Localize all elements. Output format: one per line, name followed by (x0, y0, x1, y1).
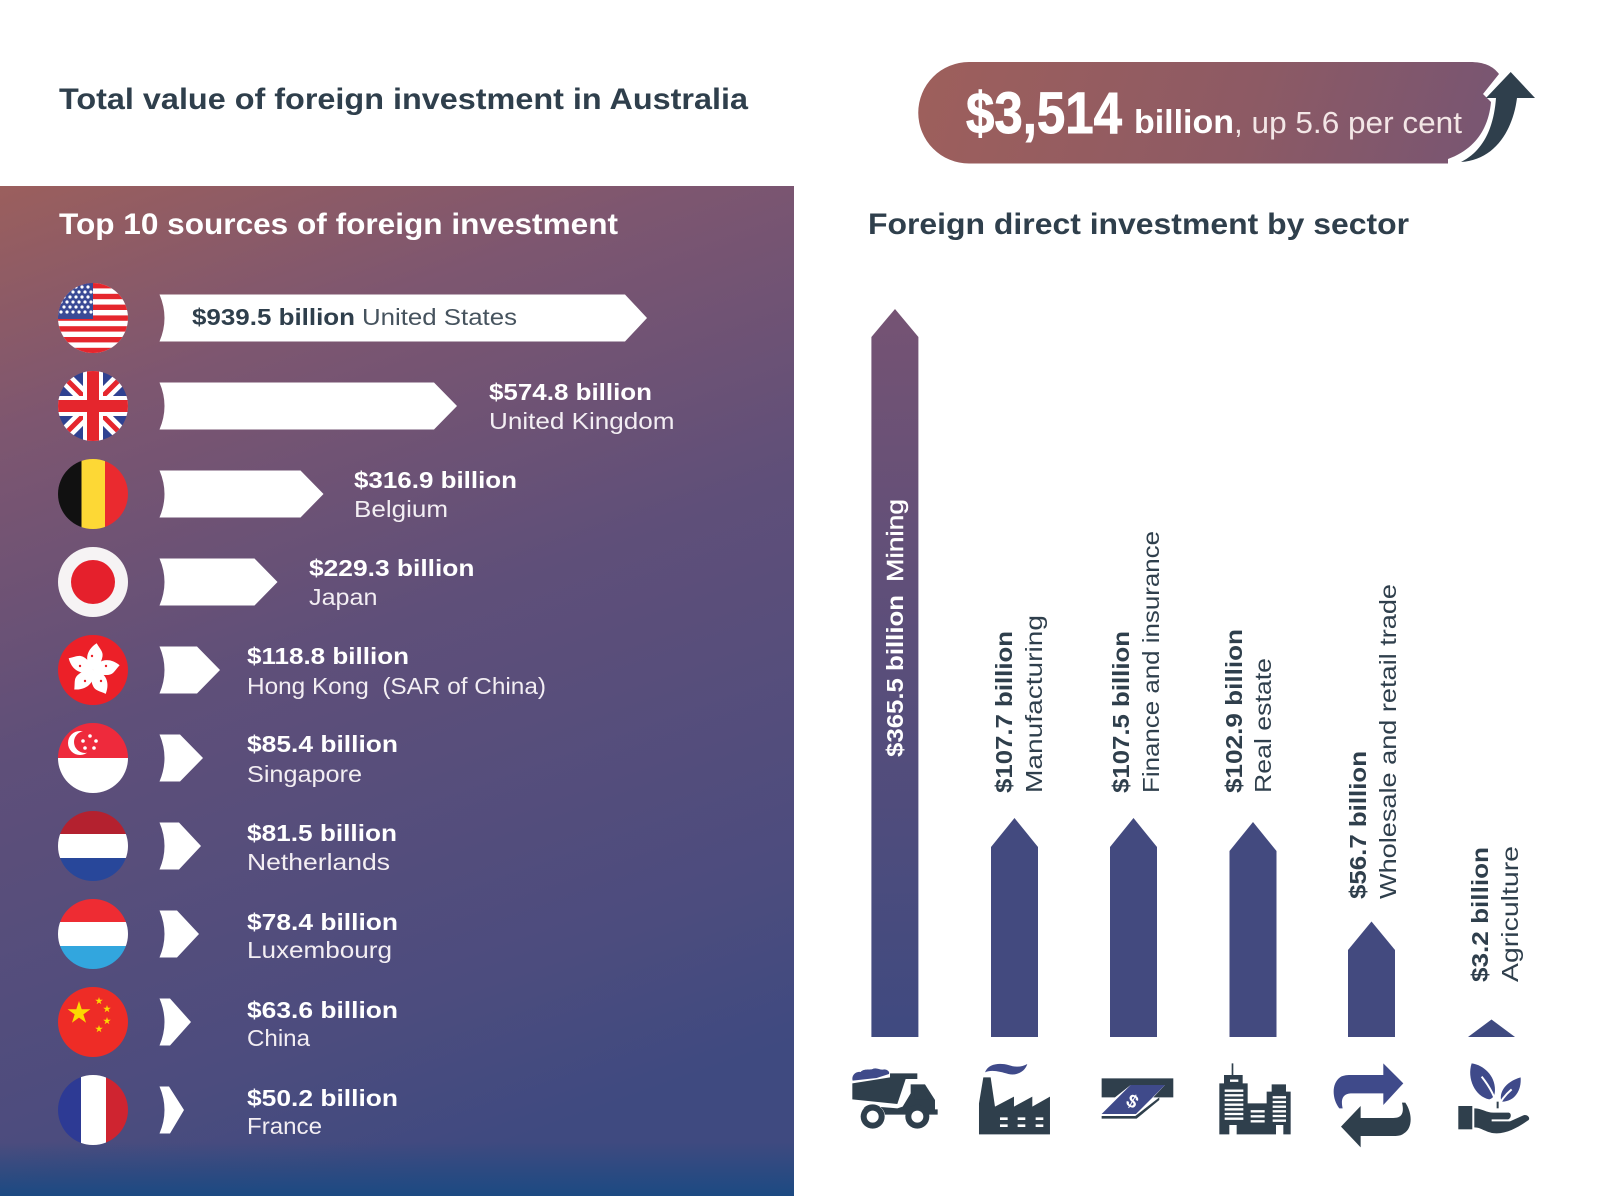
value: Netherlands: $81.5 billion (247, 820, 397, 846)
bar: Wholesale (1348, 922, 1395, 1037)
icon: buildings (1219, 1063, 1291, 1134)
title: Total value of foreign investment in Australia (59, 83, 748, 116)
flag: Netherlands (58, 811, 128, 881)
name: United States: United States (362, 304, 517, 330)
row: Luxembourg (58, 899, 398, 969)
callout: total value pill (918, 62, 1535, 164)
name: Belgium: Belgium (354, 496, 448, 522)
bar: Real estate (1230, 822, 1276, 1037)
row: United Kingdom (58, 371, 674, 441)
name: Wholesale: Wholesale and retail trade (1375, 584, 1401, 899)
panel background (0, 186, 794, 1196)
bar: Singapore (160, 734, 203, 782)
column: Real estate (1221, 629, 1276, 1037)
bar: Finance (1110, 818, 1157, 1037)
bar: United Kingdom (160, 382, 457, 430)
total amount: $3,514 (966, 81, 1122, 146)
row: Japan (58, 547, 474, 617)
value: Wholesale: $56.7 billion (1345, 751, 1371, 899)
value: Singapore: $85.4 billion (247, 731, 398, 757)
name: Singapore: Singapore (247, 761, 362, 787)
column: Mining (871, 309, 918, 1037)
flag: China (58, 987, 128, 1057)
name: France: France (247, 1113, 322, 1139)
growth text: , up 5.6 per cent (1234, 105, 1462, 140)
value: Manufacturing: $107.7 billion (991, 631, 1017, 793)
name: Hong Kong: Hong Kong (SAR of China) (247, 673, 546, 699)
bar: Manufacturing (991, 818, 1038, 1037)
row: Hong Kong (58, 635, 546, 705)
bar: Belgium (160, 470, 324, 518)
value: China: $63.6 billion (247, 997, 398, 1023)
column: Wholesale and retail trade (1345, 584, 1401, 1037)
bar chart: investment by sector (871, 309, 1523, 1037)
bar: United States (160, 294, 647, 342)
pill background (918, 62, 1499, 164)
name: Agriculture: Agriculture (1497, 846, 1523, 982)
flag: France (58, 1075, 128, 1145)
icon: up arrow (1461, 72, 1535, 162)
bar: Mining (871, 309, 918, 1037)
row: China (58, 987, 398, 1057)
value: France: $50.2 billion (247, 1085, 398, 1111)
name: Netherlands: Netherlands (247, 849, 390, 875)
icon: wholesale trade arrows (1334, 1063, 1411, 1147)
row: Singapore (58, 723, 398, 793)
row: Netherlands (58, 811, 397, 881)
value: United Kingdom: $574.8 billion (489, 379, 652, 405)
value: Finance: $107.5 billion (1108, 631, 1134, 793)
icon: finance card: $ (1123, 1089, 1143, 1113)
value: Japan: $229.3 billion (309, 555, 474, 581)
flag: Singapore (58, 723, 128, 793)
column: Finance and insurance (1108, 531, 1164, 1037)
name: Japan: Japan (309, 584, 378, 610)
name: Finance: Finance and insurance (1138, 531, 1164, 793)
flag: Hong Kong (58, 635, 128, 705)
value: United States: $939.5 billion (192, 304, 355, 330)
icon: finance card (1102, 1078, 1173, 1119)
bar: France (160, 1086, 184, 1134)
bar: Luxembourg (160, 910, 199, 958)
value: Hong Kong: $118.8 billion (247, 643, 409, 669)
heading: sector: Foreign direct investment by sector (868, 208, 1409, 241)
row: Belgium (58, 459, 517, 529)
icon: agriculture hand (1458, 1063, 1529, 1133)
flag: United States (58, 283, 128, 353)
flag: Japan (58, 547, 128, 617)
bar: Agriculture (1468, 1020, 1515, 1037)
name: United Kingdom: United Kingdom (489, 408, 674, 434)
flag: Luxembourg (58, 899, 128, 969)
heading: top 10 sources: Top 10 sources of foreign investment (59, 208, 618, 241)
bar: China (160, 998, 191, 1046)
name: China: China (247, 1025, 310, 1051)
panel: top 10 sources (0, 186, 794, 1196)
icon: factory (979, 1064, 1050, 1134)
row: United States (58, 283, 647, 353)
name: Manufacturing: Manufacturing (1021, 615, 1047, 793)
bar: Japan (160, 558, 278, 606)
name: Real estate: Real estate (1250, 658, 1276, 793)
value: Real estate: $102.9 billion (1221, 629, 1247, 793)
bar: Netherlands (160, 822, 201, 870)
column: Agriculture (1467, 846, 1523, 1037)
row: France (58, 1075, 398, 1145)
value: Luxembourg: $78.4 billion (247, 909, 398, 935)
value: Belgium: $316.9 billion (354, 467, 517, 493)
flag: Belgium (58, 459, 128, 529)
value: Agriculture: $3.2 billion (1467, 847, 1493, 982)
column: Manufacturing (991, 615, 1047, 1037)
icon: mining truck (852, 1068, 938, 1129)
name: Luxembourg: Luxembourg (247, 937, 392, 963)
value: Mining: $365.5 billion (882, 595, 908, 757)
billion: billion (1134, 103, 1234, 140)
panel bottom glow (0, 1142, 794, 1196)
name: Mining: Mining (882, 499, 908, 582)
bar: Hong Kong (160, 646, 220, 694)
flag: United Kingdom (58, 371, 128, 441)
